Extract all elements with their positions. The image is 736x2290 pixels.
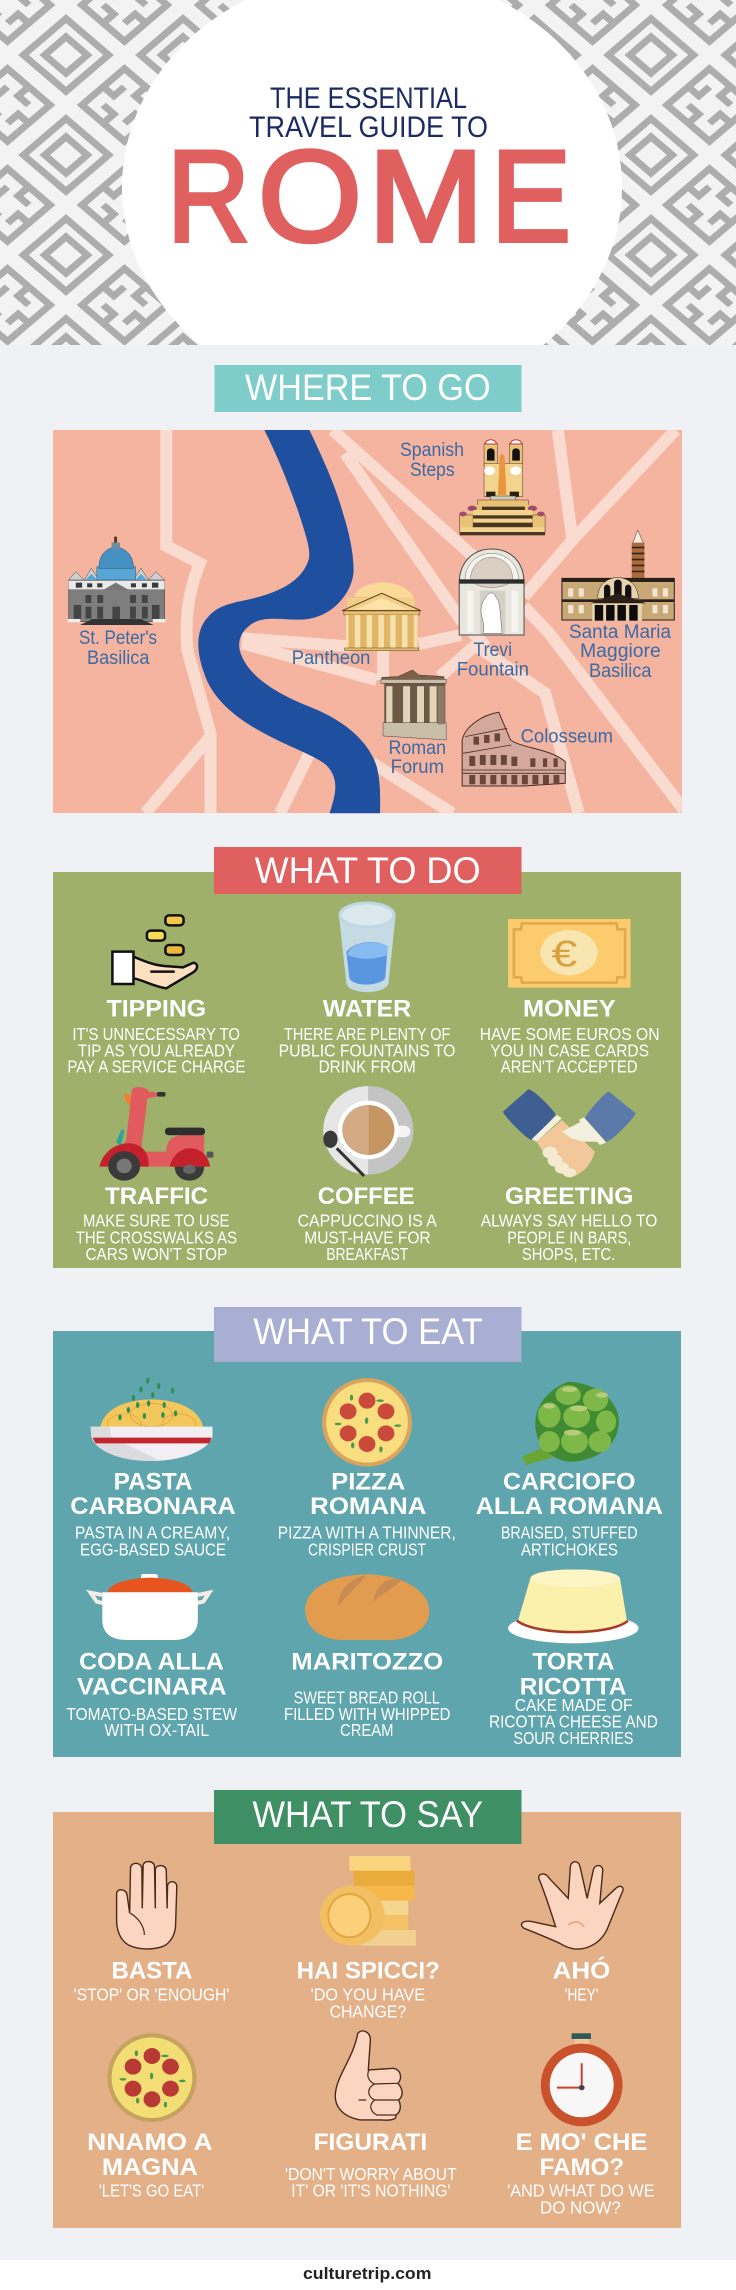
- map labels: Fountain: [457, 660, 529, 681]
- banner: what to do: [214, 847, 522, 894]
- landmark: Colosseum: [462, 712, 565, 786]
- icon: cup of cappuccino: [323, 1086, 413, 1176]
- item: water: [279, 903, 455, 1077]
- landmark: Pantheon: [342, 582, 421, 651]
- description: HAVE SOME EUROS ON: [480, 1024, 660, 1044]
- heading: ALLA ROMANA: [476, 1493, 663, 1520]
- icon: red scooter: [99, 1087, 213, 1181]
- heading: E MO' CHE: [516, 2129, 647, 2156]
- landmark: Trevi Fountain: [459, 549, 524, 635]
- item: greeting: [481, 1089, 657, 1264]
- item: aho: [521, 1862, 623, 2005]
- icon: artichoke: [522, 1382, 619, 1465]
- item: hai spicci: [297, 1856, 440, 2021]
- description: ALWAYS SAY HELLO TO: [481, 1211, 657, 1231]
- description: PIZZA WITH A THINNER,: [278, 1523, 456, 1543]
- description: SOUR CHERRIES: [514, 1728, 633, 1748]
- description: IT'S UNNECESSARY TO: [72, 1024, 240, 1044]
- footer: culturetrip.com: [0, 2260, 736, 2290]
- description: 'HEY': [565, 1985, 598, 2005]
- description: 'AND WHAT DO WE: [507, 2181, 654, 2201]
- heading: CARCIOFO: [503, 1468, 636, 1495]
- icon: euro banknote: €: [552, 933, 577, 975]
- description: TIP AS YOU ALREADY: [78, 1041, 235, 1061]
- heading: HAI SPICCI?: [297, 1957, 440, 1984]
- item: maritozzo: [284, 1574, 450, 1740]
- description: CAPPUCCINO IS A: [298, 1211, 437, 1231]
- panel: what to do: [53, 847, 681, 1268]
- description: MAKE SURE TO USE: [83, 1211, 229, 1231]
- title: Rome: O: [258, 123, 362, 269]
- description: PASTA IN A CREAMY,: [75, 1523, 230, 1543]
- description: PUBLIC FOUNTAINS TO: [279, 1041, 455, 1061]
- river: [198, 430, 380, 813]
- heading: GREETING: [505, 1183, 633, 1210]
- description: FILLED WITH WHIPPED: [284, 1704, 450, 1724]
- description: [480, 1024, 660, 1077]
- item: torta ricotta: [489, 1570, 658, 1748]
- heading: TRAFFIC: [105, 1183, 208, 1210]
- banner: where to go: WHERE TO GO: [245, 367, 491, 408]
- description: [284, 1687, 450, 1740]
- banner: what to eat: WHAT TO EAT: [253, 1311, 483, 1352]
- map labels: Steps: [410, 460, 455, 481]
- icon: handshake: [503, 1089, 636, 1177]
- description: [75, 1523, 230, 1559]
- heading: PASTA: [114, 1468, 192, 1495]
- icon: ricotta cake: [508, 1570, 639, 1643]
- footer: culturetrip.com: culturetrip.com: [303, 2264, 431, 2283]
- description: [279, 1024, 455, 1077]
- icon: bowl of pasta: [91, 1378, 213, 1461]
- map labels: [79, 440, 671, 778]
- icon: open hand: [521, 1862, 623, 1949]
- heading: [87, 2129, 213, 2181]
- map labels: Trevi: [474, 640, 512, 661]
- title: Rome: [167, 123, 571, 269]
- description: PEOPLE IN BARS,: [507, 1227, 631, 1247]
- panel: where to go map: [53, 430, 684, 813]
- title: Rome: E: [491, 123, 571, 269]
- landmark: Spanish Steps: [459, 440, 545, 535]
- icon: euro banknote: [508, 919, 631, 988]
- item: money: [480, 919, 660, 1077]
- item: figurati: [285, 2031, 457, 2201]
- description: [489, 1695, 658, 1748]
- description: [278, 1523, 456, 1559]
- map labels: Colosseum: [521, 727, 613, 748]
- icon: stop hand: [117, 1861, 177, 1949]
- header: patterned hero: [0, 0, 736, 345]
- icon: glass of water: [339, 903, 396, 992]
- banner: what to do: WHAT TO DO: [255, 850, 481, 891]
- heading: [310, 1468, 426, 1520]
- icon: thumbs up: [335, 2031, 402, 2120]
- item: tipping: [67, 915, 245, 1077]
- heading: ROMANA: [310, 1493, 426, 1520]
- description: [481, 1211, 657, 1264]
- heading: FAMO?: [540, 2154, 624, 2181]
- heading: COFFEE: [318, 1183, 415, 1210]
- description: RICOTTA CHEESE AND: [489, 1712, 658, 1732]
- heading: FIGURATI: [314, 2129, 427, 2156]
- description: 'DON'T WORRY ABOUT: [285, 2164, 457, 2184]
- map labels: Basilica: [87, 648, 150, 669]
- map labels: Forum: [391, 757, 444, 778]
- description: EGG-BASED SAUCE: [80, 1539, 226, 1559]
- description: [501, 1523, 638, 1559]
- item: traffic: [76, 1087, 237, 1264]
- description: [76, 1211, 237, 1264]
- landmark: Roman Forum: [381, 670, 446, 740]
- description: CHANGE?: [330, 2001, 406, 2021]
- description: DRINK FROM: [319, 1057, 416, 1077]
- description: 'STOP' OR 'ENOUGH': [74, 1985, 229, 2005]
- description: THE CROSSWALKS AS: [76, 1227, 237, 1247]
- heading: BASTA: [112, 1957, 192, 1984]
- description: SHOPS, ETC.: [522, 1244, 615, 1264]
- icon: cooking pot: [91, 1574, 209, 1640]
- heading: MARITOZZO: [291, 1648, 443, 1675]
- description: WITH OX-TAIL: [104, 1720, 209, 1740]
- description: AREN'T ACCEPTED: [501, 1057, 638, 1077]
- map labels: Spanish: [400, 440, 464, 461]
- item: pasta carbonara: [70, 1378, 236, 1559]
- description: BRAISED, STUFFED: [501, 1523, 638, 1543]
- description: YOU IN CASE CARDS: [490, 1041, 649, 1061]
- title: Rome: M: [368, 123, 484, 269]
- description: [67, 1024, 245, 1077]
- heading: TIPPING: [106, 996, 206, 1023]
- heading: [70, 1468, 236, 1520]
- description: CRISPIER CRUST: [308, 1539, 426, 1559]
- panel: what to say: [53, 1790, 681, 2228]
- description: CREAM: [340, 1720, 394, 1740]
- description: THERE ARE PLENTY OF: [284, 1024, 450, 1044]
- item: carciofo alla romana: [476, 1382, 663, 1559]
- item: e mo che famo: [507, 2033, 654, 2217]
- heading: WATER: [323, 996, 411, 1023]
- description: MUST-HAVE FOR: [304, 1227, 431, 1247]
- title: the essential travel guide to: THE ESSENTIAL: [270, 82, 467, 115]
- item: coffee: [298, 1086, 437, 1264]
- panel: what to eat: [53, 1307, 681, 1757]
- landmark: Santa Maria Maggiore: [562, 530, 674, 621]
- title: the essential travel guide to: TRAVEL GUIDE TO: [249, 111, 488, 144]
- description: CARS WON'T STOP: [86, 1244, 227, 1264]
- heading: CODA ALLA: [79, 1648, 224, 1675]
- title: Rome: R: [167, 123, 250, 269]
- description: TOMATO-BASED STEW: [66, 1704, 237, 1724]
- heading: [520, 1648, 626, 1700]
- description: 'LET'S GO EAT': [99, 2181, 204, 2201]
- heading: RICOTTA: [520, 1673, 626, 1700]
- banner: what to say: WHAT TO SAY: [252, 1794, 483, 1835]
- landmark: St Peter's Basilica: [68, 537, 165, 625]
- banner: what to say: [214, 1790, 522, 1844]
- description: BREAKFAST: [326, 1244, 409, 1264]
- map labels: St. Peter's: [79, 628, 157, 649]
- icon: bread roll: [305, 1574, 429, 1640]
- heading: [77, 1648, 226, 1700]
- icon: stack of coins: [320, 1856, 416, 1946]
- icon: pizza: [107, 2033, 197, 2122]
- description: [66, 1704, 237, 1740]
- description: [285, 2164, 457, 2201]
- description: DO NOW?: [540, 2197, 621, 2217]
- heading: PIZZA: [331, 1468, 405, 1495]
- icon: stopwatch: [541, 2033, 623, 2126]
- map labels: Pantheon: [292, 648, 370, 669]
- heading: [516, 2129, 647, 2181]
- description: ARTICHOKES: [521, 1539, 618, 1559]
- description: [311, 1985, 425, 2021]
- map labels: Basilica: [589, 661, 652, 682]
- map roads and river: [68, 430, 684, 813]
- title: the essential travel guide to: [249, 82, 488, 144]
- item: pizza romana: [278, 1378, 456, 1559]
- heading: NNAMO A: [87, 2129, 213, 2156]
- item: nnamo a magna: [87, 2033, 213, 2201]
- description: SWEET BREAD ROLL: [294, 1687, 440, 1707]
- icon: pizza: [322, 1378, 412, 1467]
- description: [507, 2181, 654, 2217]
- map labels: Santa Maria: [569, 622, 671, 643]
- item: coda alla vaccinara: [66, 1574, 237, 1740]
- map labels: Maggiore: [580, 641, 661, 662]
- heading: [476, 1468, 663, 1520]
- icon: hand with coins: [112, 915, 197, 988]
- description: CAKE MADE OF: [515, 1695, 633, 1715]
- description: [298, 1211, 437, 1264]
- heading: MAGNA: [102, 2154, 198, 2181]
- item: basta: [74, 1861, 229, 2005]
- description: IT' OR 'IT'S NOTHING': [291, 2181, 450, 2201]
- description: PAY A SERVICE CHARGE: [67, 1057, 245, 1077]
- heading: AHÓ: [553, 1956, 610, 1984]
- heading: MONEY: [523, 996, 616, 1023]
- heading: CARBONARA: [70, 1493, 236, 1520]
- description: 'DO YOU HAVE: [311, 1985, 425, 2005]
- map labels: Roman: [388, 738, 446, 759]
- heading: VACCINARA: [77, 1673, 226, 1700]
- heading: TORTA: [532, 1648, 614, 1675]
- banner: what to eat: [214, 1307, 522, 1362]
